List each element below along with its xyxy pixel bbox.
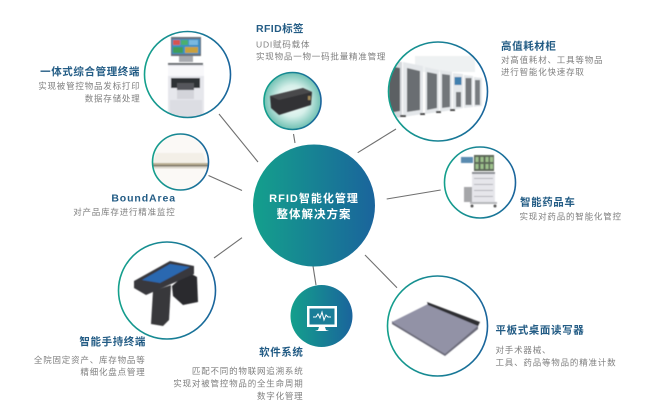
label: high-value consumables cabinets: 对高值耗材、工具等物品: [501, 55, 603, 65]
icon: RFID tag: [264, 72, 321, 130]
label: BoundArea: 对产品库存进行精准监控: [73, 207, 176, 217]
central hub circle: RFID智能化管理: [269, 191, 359, 205]
label: flat desktop reader: 对手术器械、: [496, 345, 551, 355]
icon: software system monitor: [290, 285, 352, 347]
icon: high-value consumables cabinets: [388, 42, 488, 141]
label: high-value consumables cabinets: 高值耗材柜: [501, 40, 556, 52]
label: handheld RFID terminal: [34, 335, 146, 377]
label: handheld RFID terminal: 智能手持终端: [79, 335, 146, 348]
label: all-in-one terminal: 实现被管控物品发标打印: [38, 81, 140, 91]
label: flat desktop reader: 工具、药品等物品的精准计数: [496, 358, 616, 368]
label: handheld RFID terminal: 全院固定资产、库存物品等: [34, 355, 146, 365]
connector lines: [208, 114, 441, 288]
label: BoundArea: BoundArea: [111, 192, 176, 204]
label: RFID tag: 实现物品一物一码批量精准管理: [256, 52, 386, 62]
label: software system: 数字化管理: [257, 391, 304, 401]
label: smart medicine cart: 智能药品车: [520, 196, 576, 208]
label: high-value consumables cabinets: [501, 40, 603, 77]
icon: smart medicine cart: [444, 147, 516, 218]
icon: all-in-one terminal: [144, 32, 230, 120]
label: all-in-one terminal: [38, 65, 140, 104]
label: smart medicine cart: 实现对药品的智能化管控: [520, 212, 622, 222]
label: software system: 软件系统: [259, 346, 304, 358]
icon: BoundArea strip: [152, 134, 210, 190]
label: flat desktop reader: [496, 324, 616, 368]
label: RFID tag: [256, 22, 386, 62]
label: software system: 实现对被管控物品的全生命周期: [173, 378, 304, 388]
label: software system: [173, 346, 304, 401]
label: BoundArea: [73, 192, 176, 217]
label: all-in-one terminal: 数据存储处理: [85, 94, 140, 104]
label: RFID tag: UDI赋码载体: [256, 40, 310, 50]
label: smart medicine cart: [520, 196, 622, 222]
label: RFID tag: RFID标签: [256, 22, 304, 35]
label: software system: 匹配不同的物联网追溯系统: [192, 366, 304, 376]
label: handheld RFID terminal: 精细化盘点管理: [80, 367, 146, 377]
icon: flat desktop reader: [388, 276, 488, 376]
label: all-in-one terminal: 一体式综合管理终端: [40, 65, 140, 78]
central hub circle: 整体解决方案: [276, 207, 352, 221]
label: flat desktop reader: 平板式桌面读写器: [496, 324, 584, 336]
icon: handheld RFID terminal: [118, 242, 216, 339]
central hub circle: [253, 144, 375, 266]
label: high-value consumables cabinets: 进行智能化快速存取: [501, 67, 585, 77]
